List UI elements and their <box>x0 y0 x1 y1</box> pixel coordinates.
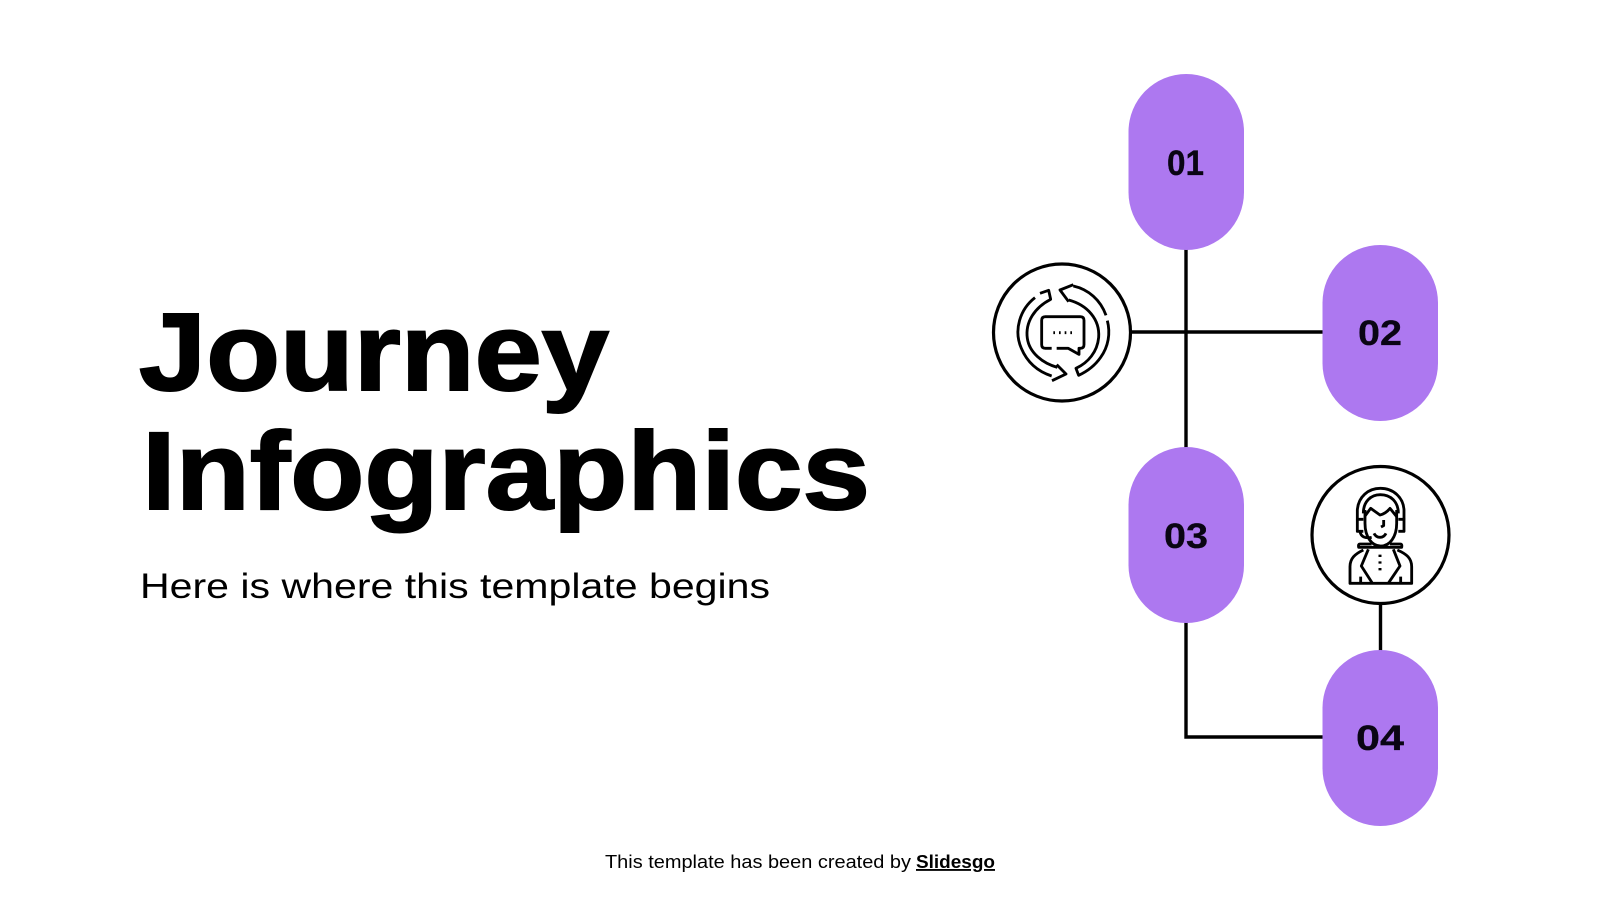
step 03 pill <box>1128 447 1244 623</box>
subtitle: Here is where this template begins <box>140 566 770 606</box>
title <box>139 291 870 533</box>
icon: support agent with headset <box>1312 466 1449 604</box>
step 03 pill: 03 <box>1164 517 1208 556</box>
title: Journey <box>139 291 609 414</box>
step 01 pill <box>1128 74 1244 250</box>
step 02 pill: 02 <box>1358 314 1402 353</box>
step 01 pill: 01 <box>1167 144 1204 183</box>
step 04 pill: 04 <box>1356 719 1405 758</box>
icon: chat with refresh arrows <box>994 264 1130 401</box>
footer credit: Slidesgo <box>916 851 995 872</box>
title: Infographics <box>142 410 870 533</box>
connector lines <box>1128 248 1380 737</box>
footer credit: This template has been created by <box>605 851 912 872</box>
step 02 pill <box>1322 245 1438 421</box>
step 04 pill <box>1322 650 1438 826</box>
